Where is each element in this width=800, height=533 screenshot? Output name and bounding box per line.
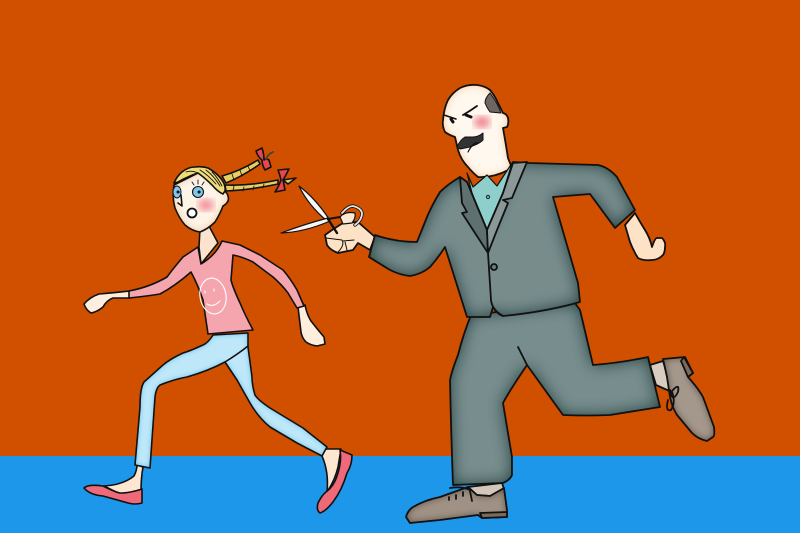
girl hair strands <box>186 170 222 186</box>
upper bow tail <box>266 152 273 159</box>
girl right hand <box>298 305 325 346</box>
background: blue floor <box>0 456 800 533</box>
man angry eyebrow right <box>463 106 477 115</box>
figure: man running <box>281 85 714 523</box>
man jacket <box>369 162 635 317</box>
man back hand <box>625 213 665 260</box>
girl front foot <box>104 465 143 494</box>
scissor blades and handle <box>281 186 340 233</box>
smiley on sweater <box>197 276 229 316</box>
girl jeans <box>135 333 327 468</box>
girl lower braid <box>225 180 278 191</box>
trouser crease <box>518 347 527 365</box>
girl lower bow <box>275 169 289 192</box>
man cheek blush <box>474 116 490 128</box>
girl front shoe <box>84 485 142 504</box>
jacket right lapel <box>487 162 527 253</box>
man mouth <box>468 143 478 152</box>
braid twists <box>232 166 264 191</box>
man front sock <box>468 483 504 496</box>
girl lower braid tip <box>283 178 296 184</box>
girl nose <box>178 195 182 206</box>
girl left hand <box>84 291 130 313</box>
man moustache <box>457 133 483 149</box>
girl upper bow <box>256 148 271 170</box>
girl neck <box>199 226 218 264</box>
girl upper braid <box>222 160 260 183</box>
girl right eye <box>192 186 204 198</box>
man front shoe <box>406 487 507 523</box>
back shoe heel <box>681 357 693 377</box>
man angry eyebrow left <box>444 115 456 119</box>
girl jeans inner seam <box>225 346 248 362</box>
back shoe laces <box>667 387 678 410</box>
man trousers <box>450 303 660 485</box>
girl head <box>173 172 228 232</box>
man hair patch <box>485 93 501 113</box>
girl eyelashes <box>174 180 204 185</box>
man eyes <box>451 115 471 122</box>
jacket left lapel <box>460 177 488 253</box>
girl left eye <box>173 186 181 198</box>
finger lines <box>326 238 354 252</box>
man teal shirt <box>467 163 512 230</box>
girl cheek blush <box>198 199 214 211</box>
girl pink sweater <box>129 241 304 334</box>
man back shoe <box>663 357 714 441</box>
girl pupils <box>178 190 199 194</box>
scissor thumb and ring <box>340 206 362 225</box>
jacket button <box>491 264 497 270</box>
girl hair <box>174 167 225 194</box>
shirt placket button <box>486 195 490 199</box>
front shoe laces <box>449 487 472 501</box>
girl rear shoe <box>317 450 352 513</box>
jacket center line <box>488 253 503 316</box>
man back shoe sock <box>650 361 674 393</box>
figure: girl running <box>84 148 352 513</box>
girl rear foot <box>322 449 341 492</box>
front shoe heel <box>480 512 507 518</box>
man head and neck <box>443 85 512 177</box>
man grabbing hand <box>325 222 375 253</box>
girl mouth <box>188 208 196 218</box>
